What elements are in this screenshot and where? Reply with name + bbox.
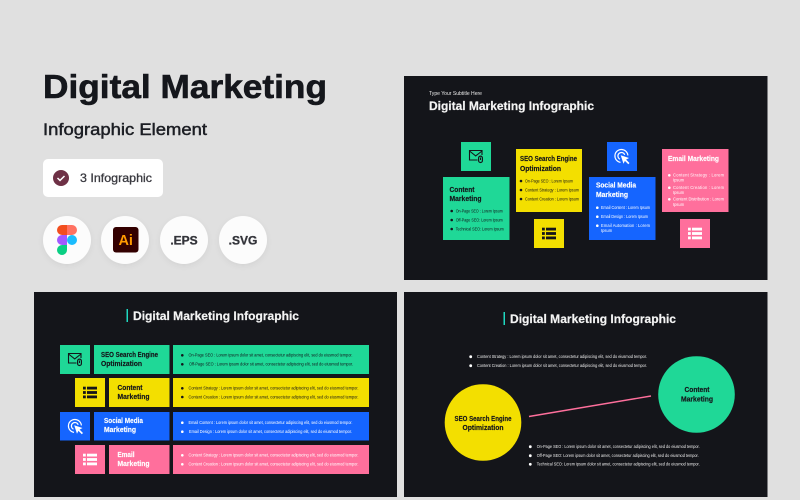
card: Content Marketing: Off-Page SEO: Lorem Ipsum [456, 217, 503, 222]
row: SEO Search Engine Optimization: On-Page SEO : Lorem ipsum dolor sit amet, consectetur adipiscing elit, sed do eiusmod tempor. [188, 353, 352, 358]
card: SEO Search Engine Optimization [516, 149, 582, 212]
subheading: Infographic Element: Infographic Element [43, 121, 207, 139]
panel subtitle: Type Your Subtitle Here [429, 91, 482, 97]
row: SEO Search Engine Optimization [60, 345, 369, 374]
row: Email Marketing: Email [118, 452, 135, 459]
badge: 3 Infographic: 3 Infographic [80, 171, 152, 185]
icon: EPS format [160, 216, 208, 264]
panel: scattered cards infographic [404, 76, 768, 280]
icon tile: list pink [680, 219, 710, 248]
card: Email Marketing: Content Creation : Lorem [673, 185, 725, 190]
badge: 3 Infographic [43, 159, 163, 197]
panel: rows infographic [34, 292, 397, 497]
row: Social Media Marketing: Social Media [104, 418, 143, 425]
row: Email Marketing: Content Strategy : Lorem ipsum dolor sit amet, consectetur adipiscing elit, sed do eiusmod tempor. [188, 453, 358, 458]
heading: Digital Marketing: Digital Marketing [43, 69, 327, 106]
icon tile: list yellow [534, 219, 564, 248]
card: Social Media Marketing: Email Content : Lorem Ipsum [601, 205, 651, 210]
row: Social Media Marketing: Marketing [104, 427, 136, 434]
card: SEO Search Engine Optimization: Content Creation : Lorem Ipsum [525, 196, 580, 201]
circle: SEO Search Engine Optimization [445, 384, 521, 461]
icon tile: click target [607, 142, 637, 171]
row: Social Media Marketing [60, 412, 369, 440]
row: Content Marketing: Marketing [118, 394, 150, 401]
card: Content Marketing: On-Page SEO : Lorem Ipsum [456, 208, 503, 213]
icon: Figma [43, 216, 91, 264]
card: Email Marketing: Content Strategy : Lorem [673, 173, 725, 178]
connector line [529, 396, 651, 416]
card: Social Media Marketing: Marketing [596, 192, 628, 199]
card: Content Marketing: Technical SEO: Lorem Ipsum [456, 226, 504, 231]
icon: SVG format: .SVG [229, 234, 257, 248]
card: SEO Search Engine Optimization: Content Strategy : Lorem Ipsum [525, 187, 580, 192]
card: Content Marketing: Marketing [450, 196, 482, 203]
panel title with accent bar: Digital Marketing Infographic [133, 309, 299, 323]
card: Social Media Marketing: Social Media [596, 182, 636, 190]
icon: SVG format [219, 216, 267, 264]
icon: Adobe Illustrator [101, 216, 149, 264]
circle: SEO Search Engine Optimization: Optimization [462, 425, 504, 432]
card: Social Media Marketing [589, 177, 656, 240]
lower bullet list: Technical SEO: Lorem ipsum dolor sit amet, consectetur adipiscing elit, sed do eiusmod tempor. [537, 462, 700, 467]
circle: Content Marketing [658, 356, 735, 433]
upper bullet list: Content Creation : Lorem ipsum dolor sit amet, consectetur adipiscing elit, sed do eiusmod tempor. [477, 363, 647, 368]
row: Content Marketing: Content [118, 385, 143, 392]
card: Social Media Marketing: Email Automation : Lorem [601, 223, 651, 228]
card: Social Media Marketing: Email Design : Lorem Ipsum [601, 214, 649, 219]
circle: Content Marketing: Content [684, 387, 710, 394]
circle: Content Marketing: Marketing [681, 396, 713, 404]
card: Social Media Marketing: Ipsum [601, 228, 613, 233]
row: Email Marketing: Content Creation : Lorem ipsum dolor sit amet, consectetur adipiscing elit, sed do eiusmod tempor. [188, 462, 358, 467]
row: Content Marketing: Content Creation : Lorem ipsum dolor sit amet, consectetur adipiscing elit, sed do eiusmod tempor. [188, 394, 358, 399]
upper bullet list [469, 354, 647, 368]
upper bullet list: Content Strategy : Lorem ipsum dolor sit amet, consectetur adipiscing elit, sed do eiusmod tempor. [477, 354, 647, 359]
card: Email Marketing: Ipsum [673, 190, 685, 195]
card: Email Marketing [662, 149, 728, 212]
lower bullet list [529, 444, 700, 467]
lower bullet list: On-Page SEO : Lorem ipsum dolor sit amet, consectetur adipiscing elit, sed do eiusmod tempor. [537, 444, 700, 449]
card: SEO Search Engine Optimization: On-Page SEO : Lorem Ipsum [525, 178, 574, 183]
row: Content Marketing [75, 378, 369, 407]
row: Email Marketing [75, 445, 369, 474]
panel: circles infographic [404, 292, 768, 497]
card: SEO Search Engine Optimization: SEO Search Engine [520, 156, 577, 163]
row: Content Marketing: Content Strategy : Lorem ipsum dolor sit amet, consectetur adipiscing elit, sed do eiusmod tempor. [188, 386, 358, 391]
card: Email Marketing: Ipsum [673, 202, 685, 207]
icon: Adobe Illustrator: Ai [118, 233, 133, 249]
card: Email Marketing: Content Distribution : Lorem [673, 197, 725, 202]
card: Content Marketing [443, 177, 510, 240]
circle: SEO Search Engine Optimization: SEO Search Engine [454, 416, 512, 423]
card: Email Marketing: Email Marketing [668, 156, 719, 163]
row: SEO Search Engine Optimization: Optimization [101, 361, 142, 368]
panel title with accent bar: Digital Marketing Infographic [510, 312, 676, 326]
lower bullet list: Off-Page SEO: Lorem ipsum dolor sit amet, consectetur adipiscing elit, sed do eiusmod tempor. [537, 453, 699, 458]
icon: EPS format: .EPS [170, 234, 198, 248]
icon tile: mail [461, 142, 491, 171]
row: Social Media Marketing: Email Design : Lorem ipsum dolor sit amet, consectetur adipiscing elit, sed do eiusmod tempor. [189, 429, 352, 434]
row: SEO Search Engine Optimization: SEO Search Engine [101, 352, 158, 359]
row: SEO Search Engine Optimization: Off-Page SEO : Lorem ipsum dolor sit amet, consectetur adipiscing elit, sed do eiusmod tempor. [189, 362, 353, 367]
row: Social Media Marketing: Email Content : Lorem ipsum dolor sit amet, consectetur adipiscing elit, sed do eiusmod tempor. [188, 420, 352, 425]
panel title: Digital Marketing Infographic [429, 99, 594, 113]
card: Content Marketing: Content [450, 187, 475, 194]
card: Email Marketing: Ipsum [673, 178, 685, 183]
row: Email Marketing: Marketing [118, 461, 150, 468]
card: SEO Search Engine Optimization: Optimization [520, 166, 561, 173]
